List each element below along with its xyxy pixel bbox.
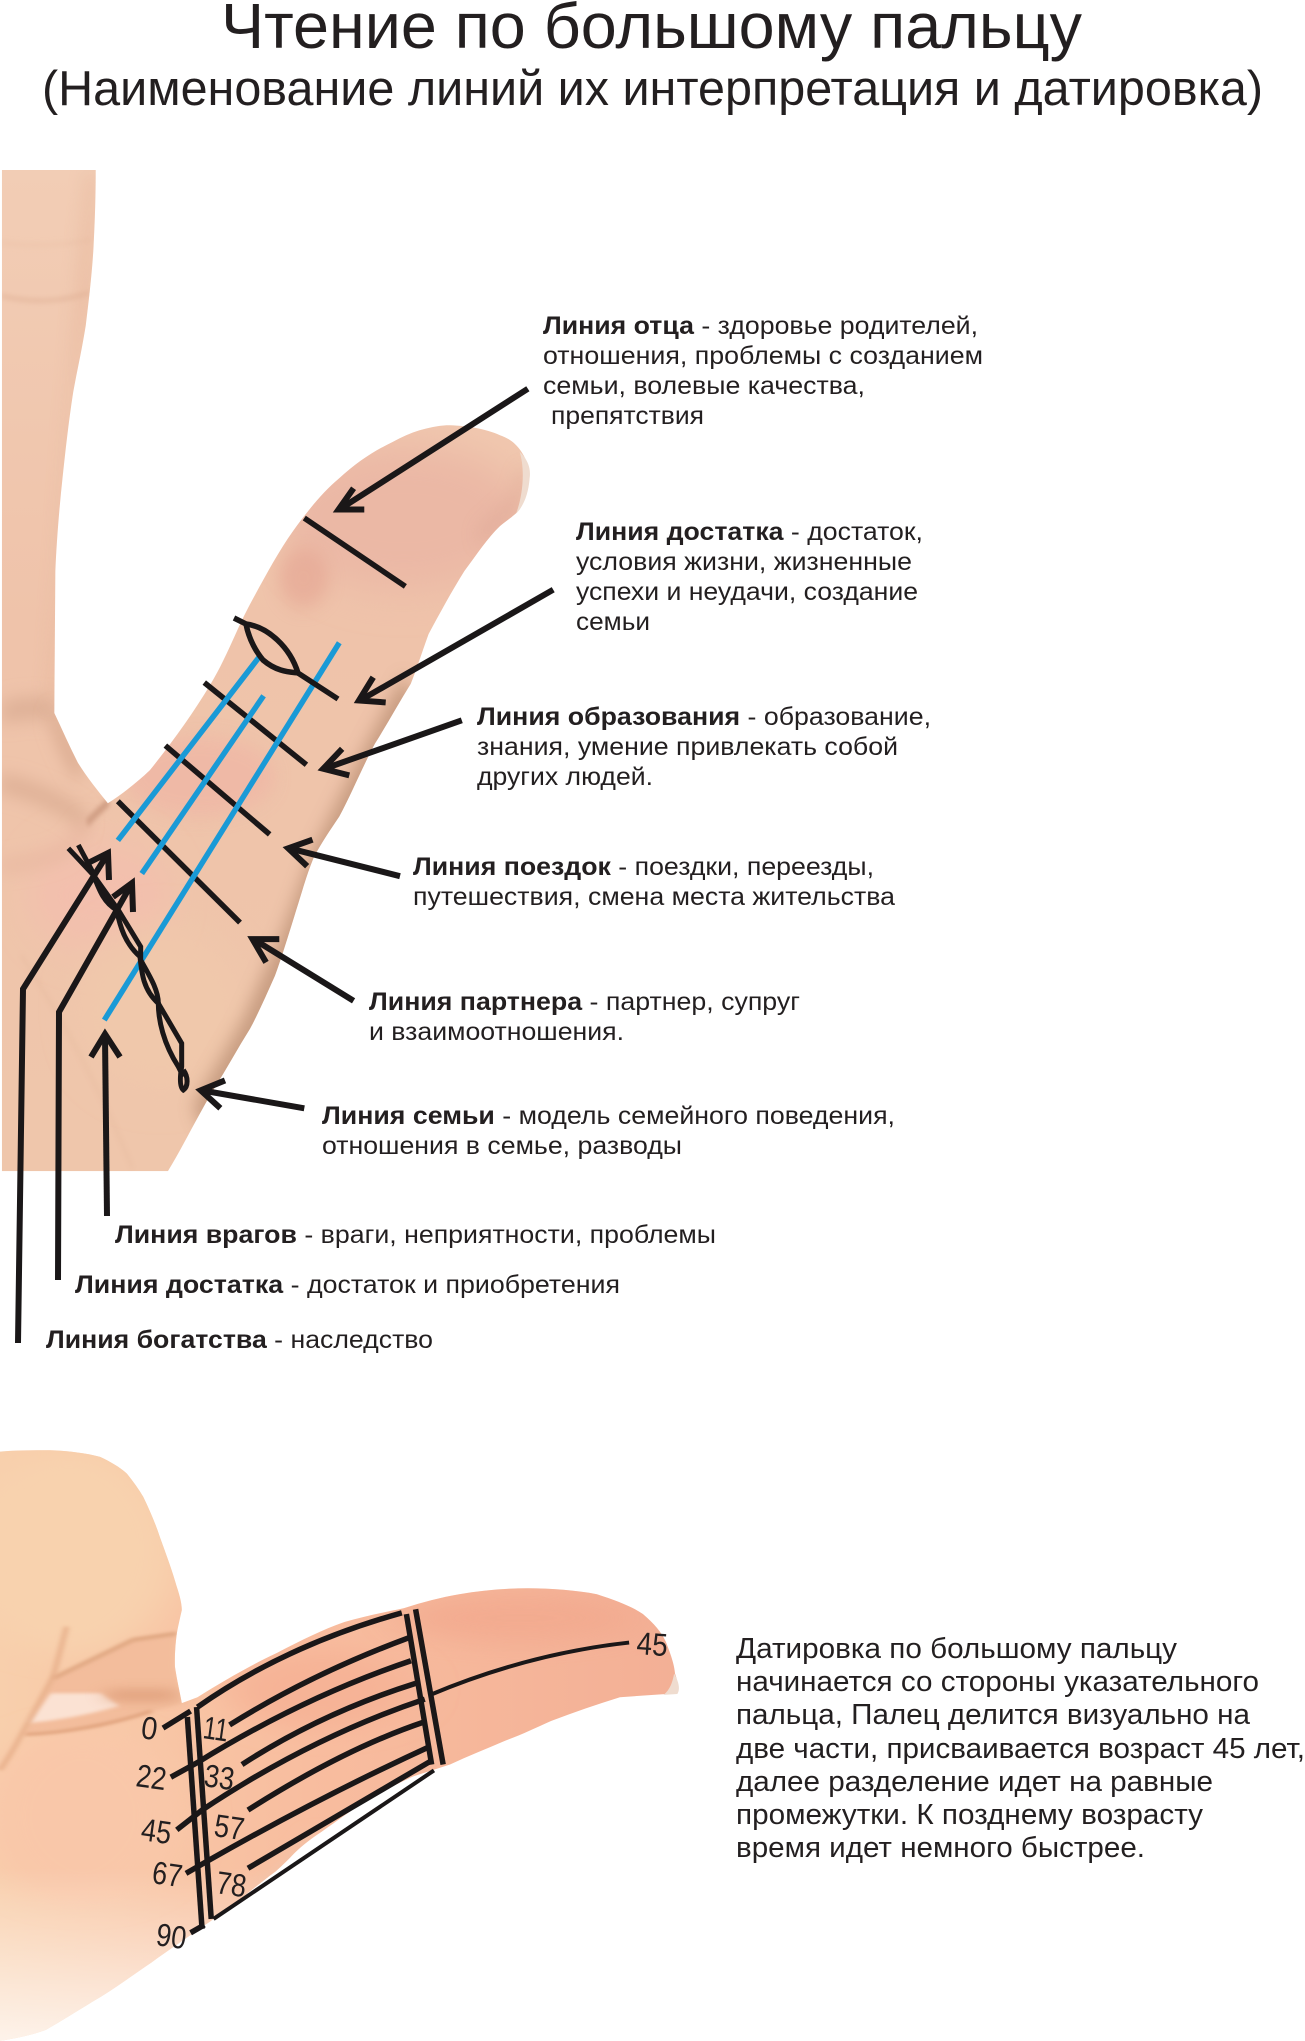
arrow: father line	[339, 389, 528, 509]
label: abundance line: успехи и неудачи, создание	[576, 578, 918, 606]
scale: frame and age arcs	[163, 1609, 629, 1933]
label: education line	[477, 703, 931, 791]
arrow: abundance line	[359, 590, 553, 702]
label: education line: других людей.	[477, 763, 653, 791]
blue lines on thumb	[104, 643, 339, 1020]
label: abundance line: семьи	[576, 608, 650, 636]
label: father line	[543, 312, 983, 430]
age numbers on scale: 45	[636, 1625, 669, 1663]
line: abundance with island	[234, 618, 338, 699]
label: enemies line: Линия врагов - враги, неприятности, проблемы	[115, 1221, 716, 1249]
line: partner	[118, 801, 240, 923]
age numbers on scale: 90	[154, 1916, 189, 1956]
label: family line	[322, 1102, 895, 1160]
text block: dating explanation: пальца, Палец делится визуально на	[736, 1699, 1250, 1731]
line: father	[304, 518, 405, 586]
text block: dating explanation: время идет немного быстрее.	[736, 1832, 1145, 1864]
thumbnail nail edge	[664, 1673, 679, 1695]
age numbers on scale: 0	[139, 1709, 160, 1747]
label: travel line	[413, 853, 895, 911]
age numbers on scale: 11	[201, 1709, 231, 1748]
arrow: family line	[201, 1080, 304, 1108]
text block: dating explanation: начинается со стороны указательного	[736, 1666, 1259, 1698]
label: father line: препятствия	[551, 402, 704, 430]
label: education line: Линия образования - образование,	[477, 703, 931, 731]
label: father line: семьи, волевые качества,	[543, 372, 865, 400]
line: family (twisted chain)	[68, 845, 187, 1090]
arrow: abundance side line	[58, 883, 133, 1280]
label: partner line: Линия партнера - партнер, супруг	[369, 988, 800, 1016]
text block: dating explanation: промежутки. К позднему возрасту	[736, 1799, 1204, 1831]
label: wealth line: Линия богатства - наследство	[46, 1326, 433, 1354]
age numbers on scale: 22	[134, 1757, 169, 1797]
label: abundance line	[576, 518, 923, 636]
label: education line: знания, умение привлекать собой	[477, 733, 898, 761]
line: education	[204, 683, 306, 765]
label: family line: Линия семьи - модель семейного поведения,	[322, 1102, 895, 1130]
label: abundance line: Линия достатка - достаток,	[576, 518, 923, 546]
age numbers on scale: 57	[212, 1807, 247, 1847]
label: partner line: и взаимоотношения.	[369, 1018, 624, 1046]
text block: dating explanation: Датировка по большому пальцу	[736, 1633, 1178, 1665]
arrow: enemies line	[91, 1034, 120, 1216]
age numbers on scale: 78	[214, 1864, 249, 1904]
text block: dating explanation: далее разделение идет на равные	[736, 1766, 1213, 1798]
label: travel line: Линия поездок - поездки, переезды,	[413, 853, 874, 881]
thumbnail nail edge	[516, 452, 530, 513]
age numbers on scale: 33	[202, 1757, 237, 1797]
arrow: education line	[323, 720, 462, 775]
label: abundance side line: Линия достатка - достаток и приобретения	[75, 1271, 620, 1299]
text block: dating explanation: две части, присваивается возраст 45 лет,	[736, 1733, 1305, 1765]
arrow: travel line	[288, 840, 400, 876]
label: travel line: путешествия, смена места жительства	[413, 883, 895, 911]
photo: hand with dating scale	[0, 1444, 684, 2041]
text block: dating explanation	[736, 1633, 1305, 1864]
photo: hand with thumb, upper diagram	[0, 170, 553, 1171]
label: father line: Линия отца - здоровье родителей,	[543, 312, 978, 340]
arrow: partner line	[252, 939, 354, 1001]
line: travel	[165, 746, 270, 834]
age numbers on scale: 67	[150, 1854, 185, 1894]
age numbers on scale: 45	[139, 1811, 174, 1851]
arrow: wealth line	[18, 853, 109, 1343]
subtitle: (Наименование линий их интерпретация и датировка)	[42, 62, 1263, 116]
label: abundance line: условия жизни, жизненные	[576, 548, 912, 576]
label: father line: отношения, проблемы с созданием	[543, 342, 983, 370]
label: family line: отношения в семье, разводы	[322, 1132, 682, 1160]
age numbers on scale	[134, 1625, 669, 1956]
label: partner line	[369, 988, 800, 1046]
